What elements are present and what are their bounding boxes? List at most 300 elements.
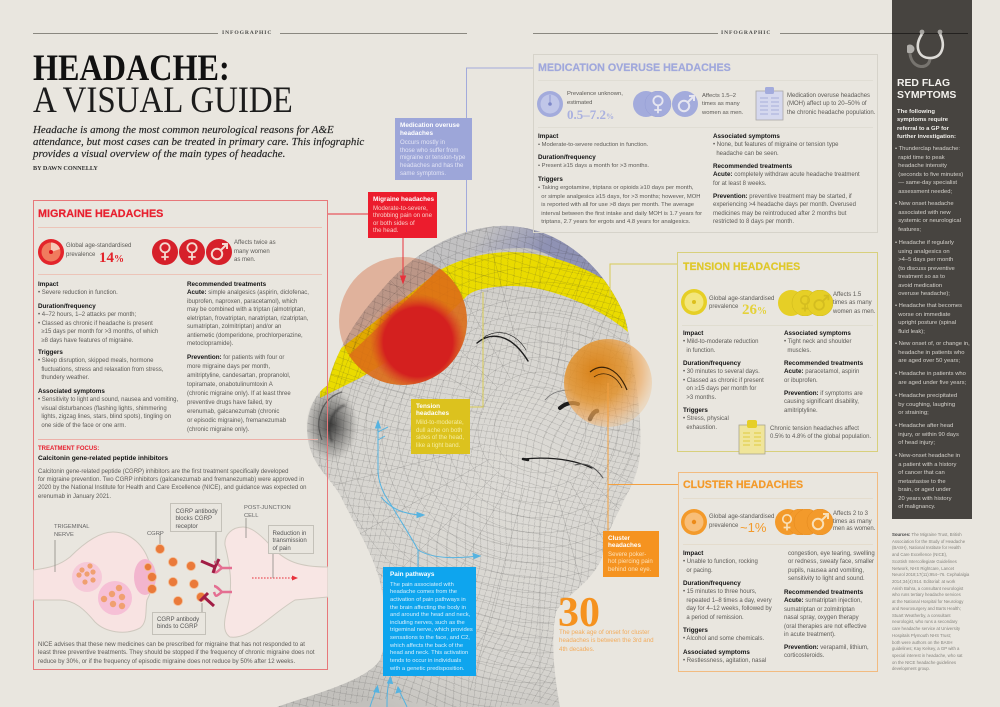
text: prevention: Prevention: if symptoms are: [784, 390, 863, 397]
connector: cluster: [608, 383, 678, 531]
receptors: [214, 562, 232, 596]
treatment focus heading: TREATMENT FOCUS:: [38, 446, 99, 452]
text: recommended treatments: may be combined with a triptan (almotriptan,: [187, 307, 305, 313]
callout: pain pathways: Pain pathways The pain associated with: [390, 570, 454, 588]
symptom list: upright posture (spinal: [898, 320, 956, 326]
text: associated symptoms: visual disturbances (flashing lights, shimmering: [41, 406, 167, 412]
text: impact: • Moderate-to-severe reduction in function.: [538, 142, 648, 148]
symptom list: treatment so as to: [898, 274, 945, 280]
chronic tension fact: [770, 425, 871, 442]
prevalence text: [709, 296, 774, 310]
sources: who runs tertiary headache services: [892, 592, 961, 597]
callout: pain pathways: tends to occur in individuals: [390, 658, 461, 664]
caption: 4th decades.: [559, 646, 594, 653]
gender text: women as men.: [702, 110, 743, 116]
sources: and Care Excellence (NICE),: [892, 552, 947, 557]
label: post-junction cell: POST-JUNCTION: [244, 505, 291, 511]
treatment focus paragraph: Calcitonin gene-related peptide (CGRP) inhibitors are the first treatment specifically developed: [38, 469, 288, 475]
text: recommended treatments: Acute: completely withdraw acute headache treatment: [713, 171, 860, 178]
symptom list: • Headache that becomes: [895, 303, 962, 309]
text: symptoms continued: sensitivity to light and sound.: [788, 576, 865, 582]
panel: tension headaches: [677, 252, 878, 452]
intro text: Headache is among the most common neurological reasons for A&E: [33, 124, 334, 136]
heading: red flag symptoms: [897, 78, 956, 102]
symptom list: rapid time to peak: [898, 154, 945, 160]
symptom list: • New onset headache: [895, 201, 954, 207]
closing paragraph: reduce by 30%, or if the frequency of episodic migraine does not reduce by 50% after 12 weeks.: [38, 659, 295, 665]
text: duration: Duration/frequency: [38, 302, 96, 310]
symptom list: worse on immediate: [898, 312, 951, 318]
text: duration: Duration/frequency: [538, 154, 596, 161]
callout: antibody binds: CGRP antibody: [157, 616, 199, 622]
text: duration: Duration/frequency: [683, 360, 741, 367]
sources: guidelines; Kay Kelsey, a GP with a: [892, 646, 959, 651]
panel: cluster headaches: [678, 472, 878, 672]
text: triggers: exhaustion.: [686, 425, 717, 431]
symptom list: • Headache precipitated: [895, 393, 957, 399]
main title: [33, 48, 293, 121]
icon: stethoscope: [907, 26, 952, 72]
icon: gender ratio: [633, 91, 698, 117]
prevalence text: [567, 91, 623, 106]
icon: clipboard: [738, 420, 766, 455]
text: triggers: [538, 176, 702, 225]
sources: on the NICE headache guidelines: [892, 660, 956, 665]
text: associated symptoms: [38, 388, 178, 429]
header rule with infographic label, right: INFOGRAPHIC: [721, 30, 771, 36]
text: prevention: Prevention: preventive treatment may be started, if: [713, 193, 852, 200]
text: associated symptoms: muscles.: [787, 348, 811, 354]
callout: cluster headaches: headaches Severe poker-: [608, 542, 646, 558]
callout: pain pathways: activation of pain pathways in: [390, 597, 466, 603]
diagram: CGRP synapse: [33, 505, 328, 638]
text: prevention: amitriptyline, candesartan, propranolol,: [187, 372, 290, 378]
text: triggers: triptans, 2.7 years for ergots and 4.8 years for analgesics.: [541, 219, 690, 225]
symptom list: avoid medication: [898, 282, 942, 288]
gender text: Affects 1.5: [833, 292, 861, 298]
sources: [892, 532, 969, 673]
sources: neurologist, who runs a secondary: [892, 619, 957, 624]
text: triggers: is reported with all for use >8 days per month. The average: [541, 202, 694, 208]
intro text: [32, 124, 364, 160]
text: prevention: (chronic migraine only). If at least three: [187, 390, 291, 396]
symptom list: (to discuss preventive: [898, 266, 955, 272]
text: prevention: experiencing >4 headache days per month. Overused: [713, 202, 856, 208]
heading: cluster: CLUSTER HEADACHES: [683, 479, 803, 491]
symptom list: of malignancy.: [898, 504, 936, 510]
text: impact: [683, 330, 758, 354]
text: prevention: restricted to 8 days per month.: [713, 219, 794, 225]
text: recommended treatments: ibuprofen, naproxen, paracetamol), which: [187, 299, 297, 305]
text: impact: Impact: [538, 133, 558, 140]
connector: tension: [470, 264, 677, 407]
caption: The peak age of onset for cluster: [559, 629, 649, 636]
sources: care headache service at University: [892, 626, 960, 631]
gender text: times as many: [702, 101, 740, 107]
symptom list: • Thunderclap headache:: [895, 146, 960, 152]
text: duration: • 4–72 hours, 1–2 attacks per month;: [38, 312, 136, 318]
text: impact: or pacing.: [686, 568, 713, 574]
callout: pain pathways: trigeminal nerve, which provides: [390, 627, 473, 633]
ear: [306, 389, 358, 461]
callout: tension headaches: sides of the head,: [416, 434, 464, 441]
text: impact: [538, 133, 648, 148]
sources: Association for the Study of Headache: [892, 539, 965, 544]
sources: both were authors on the BASH: [892, 640, 952, 644]
stat: 0.5-7.2%: 0.5–7.2%: [567, 107, 614, 122]
callout: antibody blocks receptor: blocks CGRP: [176, 515, 212, 522]
text: symptoms continued: [788, 550, 875, 584]
text: recommended treatments: antiemetic (domperidone, prochlorperazine,: [187, 333, 303, 339]
main title: A VISUAL GUIDE: [33, 80, 293, 121]
text: duration: [38, 302, 158, 344]
chronic tension fact: Chronic tension headaches affect: [770, 426, 859, 432]
diagram: CGRP synapse: CELL: [244, 513, 259, 519]
text: recommended treatments: Recommended treatments: [784, 360, 863, 367]
text: triggers: • Taking ergotamine, triptans or opioids ≥10 days per month,: [538, 185, 694, 191]
callout: medication overuse headaches: headaches Occurs mostly in: [400, 130, 445, 146]
callout: tension headaches: dull ache on both: [416, 427, 462, 434]
text: prevention: topiramate, onabotulinumtoxin A: [187, 382, 273, 388]
MOH fact: the chronic headache population.: [787, 110, 875, 116]
symptom list: are aged under five years;: [898, 380, 966, 386]
panel: medication overuse headaches: [533, 54, 878, 233]
text: prevention: [784, 644, 869, 661]
text: associated symptoms: • Tight neck and shoulder: [784, 339, 851, 345]
text: prevention: (chronic migraine only).: [187, 426, 249, 432]
callout: cluster headaches: hot piercing pain: [608, 558, 653, 565]
callout: pain pathways: sensations to the face, and C2,: [390, 635, 470, 641]
text: triggers: Triggers: [683, 407, 708, 414]
callout: reduction in pain: of pain: [272, 545, 291, 552]
text: recommended treatments: Acute: simple analgesics (aspirin, diclofenac,: [187, 289, 309, 296]
text: associated symptoms: one side of the face or one arm.: [41, 423, 126, 429]
text: duration: • 30 minutes to several days.: [683, 369, 760, 375]
gender text: times as many: [833, 519, 872, 525]
text: impact: [38, 281, 118, 296]
text: associated symptoms: • None, but features of migraine or tension type: [713, 142, 839, 148]
symptom list: headache in patients who: [898, 350, 965, 356]
text: prevention: Prevention: for patients with four or: [187, 354, 284, 360]
text: triggers: thundery weather.: [41, 375, 89, 381]
MOH fact: (MOH) affect up to 20–50% of: [787, 101, 867, 107]
icon: gender ratio: [778, 290, 833, 316]
symptom list: a patient with a history: [898, 462, 956, 468]
caption: headaches is between the 3rd and: [559, 637, 654, 644]
callout: reduction in pain: [269, 526, 313, 553]
prevalence text: Global age-standardised: [709, 514, 774, 520]
symptom list: [895, 145, 971, 511]
callout: medication overuse headaches: Medication overuse: [400, 122, 460, 129]
head silhouette: [277, 226, 641, 707]
callout: migraine headaches: throbbing pain on one: [373, 212, 432, 219]
pointer lines: [55, 518, 273, 614]
text: prevention: [187, 354, 291, 432]
symptom list: systemic or neurological: [898, 218, 961, 224]
prevalence text: prevalence: [66, 252, 95, 258]
text: prevention: amitriptyline.: [784, 408, 818, 414]
text: prevention: medicines may be reintroduced after 2 months but: [713, 211, 846, 217]
icon: clipboard: [756, 87, 784, 120]
panel: red flag symptoms: [892, 0, 972, 519]
text: triggers: • Stress, physical: [683, 416, 729, 422]
text: associated symptoms: [713, 133, 839, 157]
icon: medication prevalence: [537, 91, 563, 117]
callout: medication overuse headaches: those who suffer from: [400, 147, 458, 154]
cluster pain zone: [564, 339, 652, 427]
callout: migraine headaches: [368, 192, 437, 238]
text: duration: • Present ≥15 days a month for >3 months.: [538, 163, 649, 169]
text: duration: ≥15 days per month for >3 months, of which: [41, 329, 158, 335]
gender text: Affects twice as: [234, 240, 276, 246]
text: prevention: corticosteroids.: [784, 653, 824, 659]
sources: special interest in headache, who sat: [892, 653, 962, 658]
sources: Hospitals Plymouth NHS Trust;: [892, 633, 951, 638]
text: recommended treatments: or ibuprofen.: [784, 378, 818, 384]
text: associated symptoms: Associated symptoms: [713, 133, 780, 140]
symptom list: using analgesics on: [898, 248, 950, 254]
text: impact: Impact: [38, 281, 58, 288]
symptom list: by coughing, laughing: [898, 402, 955, 408]
text: associated symptoms: • Sensitivity to light and sound, nausea and vomiting,: [38, 397, 178, 403]
text: recommended treatments: (oral therapies are not effective: [784, 624, 867, 630]
callout: medication overuse headaches: headaches and has the: [400, 162, 463, 169]
symptom list: overuse headache);: [898, 291, 950, 297]
treatment focus heading: Calcitonin gene-related peptide inhibitors: [38, 454, 168, 462]
text: triggers: Triggers: [683, 627, 708, 634]
text: impact: Impact: [683, 550, 703, 557]
callout: antibody binds: [153, 613, 205, 634]
symptom list: • Headache after head: [895, 423, 953, 429]
face features: [477, 333, 603, 478]
text: symptoms continued: pupils, nausea and vomiting,: [788, 568, 864, 574]
text: duration: >3 months.: [686, 395, 716, 401]
symptom list: assessment needed;: [898, 188, 952, 194]
text: duration: [538, 154, 649, 169]
text: duration: on ≥15 days per month for: [686, 386, 756, 392]
prevalence text: Global age-standardised: [709, 296, 774, 302]
head illustration: [278, 226, 652, 707]
treatment focus paragraph: erenumab in January 2021.: [38, 494, 111, 500]
callout: migraine headaches: or both sides of: [373, 220, 415, 227]
heading: migraine: MIGRAINE HEADACHES: [38, 208, 163, 220]
callout: pain pathways: with a genetic predisposition.: [390, 666, 464, 672]
closing paragraph: NICE advises that these new medicines can be prescribed for migraine that has not responded to at: [38, 642, 305, 648]
intro text: referral to a GP for: [897, 126, 949, 132]
stat: 30 median age: [558, 590, 654, 653]
text: prevention: more migraine days per month,: [187, 364, 270, 370]
heading: medication overuse: MEDICATION OVERUSE HEADACHES: [538, 62, 731, 74]
text: prevention: or episodic migraine), fremanezumab: [187, 418, 286, 424]
symptom list: headache intensity: [898, 163, 947, 169]
text: associated symptoms: • Restlessness, agitation, nasal: [683, 658, 766, 664]
heading: red flag symptoms: RED FLAG: [897, 78, 950, 89]
text: recommended treatments: sumatriptan or zolmitriptan: [784, 607, 855, 613]
callout: cluster headaches: behind one eye.: [608, 566, 651, 573]
byline: BY DAWN CONNELLY: [33, 165, 98, 172]
text: duration: day for 4–12 weeks, followed by: [686, 606, 772, 612]
text: prevention: causing significant disability,: [784, 399, 859, 405]
connector: medication overuse: [466, 68, 533, 232]
callout: reduction in pain: Reduction in: [272, 530, 306, 536]
icon: gender ratio: [152, 239, 232, 265]
text: recommended treatments: [784, 589, 867, 640]
number 30: 30: [558, 590, 600, 636]
prevalence text: [66, 242, 131, 258]
migraine pain zone: [339, 257, 467, 385]
gender text: [234, 240, 276, 263]
label: CGRP: CGRP: [147, 531, 164, 537]
text: duration: • Classed as chronic if headache is present: [38, 320, 153, 326]
text: associated symptoms: headache can be seen.: [716, 151, 779, 157]
text: impact: • Severe reduction in function.: [38, 290, 118, 296]
gender text: as men.: [234, 257, 255, 263]
text: duration: • 15 minutes to three hours,: [683, 589, 756, 595]
text: triggers: [683, 407, 729, 432]
text: associated symptoms: Associated symptoms: [784, 330, 851, 337]
text: triggers: fluctuations, stress and relaxation from stress,: [41, 367, 163, 373]
callout: medication overuse headaches: [395, 118, 472, 180]
MOH fact: [787, 92, 875, 116]
text: triggers: interval between the first intake and daily MOH is 1.7 years for: [541, 211, 702, 217]
CGRP molecules: [144, 544, 206, 606]
text: duration: [683, 580, 772, 622]
text: triggers: or simple analgesics ≥15 days, for >3 months; however, MOH: [541, 194, 701, 200]
prevalence text: Prevalence unknown,: [567, 91, 623, 97]
symptom list: are aged over 50 years;: [898, 358, 960, 364]
gender text: many women: [234, 248, 270, 254]
text: duration: [683, 360, 764, 402]
treatment focus paragraph: for migraine prevention. Two CGRP inhibitors (galcanezumab and fremanezumab) were approved in: [38, 477, 304, 483]
text: recommended treatments: Recommended treatments: [784, 589, 863, 596]
text: recommended treatments: sumatriptan, zolmitriptan) and/or an: [187, 324, 281, 330]
symptom list: >4–5 days per month: [898, 257, 953, 263]
text: triggers: [683, 627, 764, 644]
text: duration: a period of remission.: [686, 615, 744, 621]
text: recommended treatments: [713, 163, 860, 187]
symptom list: of cancer that can: [898, 470, 945, 476]
main title: HEADACHE:: [33, 48, 230, 89]
text: recommended treatments: Acute: paracetamol, aspirin: [784, 368, 859, 375]
text: recommended treatments: metoclopramide).: [187, 341, 233, 347]
heading: red flag symptoms: SYMPTOMS: [897, 90, 956, 101]
gender text: times as many: [833, 300, 872, 306]
text: duration: Duration/frequency: [683, 580, 741, 587]
text: recommended treatments: Recommended treatments: [187, 281, 266, 288]
callout: medication overuse headaches: migraine or tension-type: [400, 154, 465, 161]
icon: cluster prevalence: [681, 509, 707, 535]
wireframe mesh: [278, 226, 640, 707]
text: recommended treatments: eletriptan, frovatriptan, naratriptan, rizatriptan,: [187, 316, 308, 322]
intro text: further investigation:: [897, 134, 956, 140]
prevalence text: Global age-standardised: [66, 243, 131, 249]
sources: Stuart Weatherby, a consultant: [892, 613, 951, 618]
sources: and Neurosurgery and Barts Health;: [892, 606, 961, 611]
text: triggers: Triggers: [538, 176, 563, 183]
callout: tension headaches: headaches Mild-to-moderate,: [416, 410, 464, 426]
stat: 26%: 26%: [742, 302, 767, 318]
text: recommended treatments: [784, 360, 863, 385]
callout: migraine headaches: the head.: [373, 227, 398, 234]
text: symptoms continued: or redness, sweaty face, smaller: [788, 559, 874, 565]
text: recommended treatments: Recommended treatments: [713, 163, 792, 170]
treatment focus paragraph: 2020 by the National Institute for Health and Care Excellence (NICE), and guidance was expected on: [38, 485, 306, 491]
text: impact: • Unable to function, rocking: [683, 559, 758, 565]
intro text: provides a visual overview of the main types of headache.: [33, 148, 285, 160]
text: duration: repeated 1–8 times a day, every: [686, 598, 772, 604]
sources: Sources: The Migraine Trust, British: [892, 532, 962, 537]
callout: tension headaches: like a tight band.: [416, 442, 460, 449]
treatment focus paragraph: [38, 468, 306, 500]
gender text: women as men.: [833, 308, 875, 314]
MOH fact: Medication overuse headaches: [787, 92, 870, 98]
icon: tension prevalence: [681, 289, 707, 315]
prevalence text: estimated: [567, 100, 592, 106]
symptom list: brain, or aged under: [898, 487, 951, 493]
symptom list: features;: [898, 226, 921, 232]
symptom list: 20 years with history: [898, 496, 952, 502]
text: impact: Impact: [683, 330, 703, 337]
gender text: [702, 92, 743, 116]
icon: migraine prevalence: [38, 239, 64, 265]
symptom list: — same-day specialist: [898, 180, 957, 186]
text: recommended treatments: in acute treatment).: [784, 632, 836, 638]
text: associated symptoms: Associated symptoms: [683, 649, 750, 656]
text: prevention: Prevention: verapamil, lithium,: [784, 644, 869, 651]
symptom list: • New-onset headache in: [895, 453, 960, 459]
callout: reduction in pain: transmission: [272, 537, 307, 544]
callout: antibody blocks receptor: receptor: [176, 523, 198, 530]
headband zones: purple crown and yellow tension band: [320, 222, 640, 398]
callout: antibody blocks receptor: CGRP antibody: [176, 508, 218, 514]
treatment focus heading: [38, 446, 168, 462]
gender text: Affects 1.5–2: [702, 92, 736, 98]
sources: development group.: [892, 666, 930, 671]
text: impact: [683, 550, 758, 575]
callout: pain pathways: the brain affecting the body in: [390, 604, 466, 610]
text: associated symptoms: [784, 330, 851, 355]
transmission arrow: [252, 576, 298, 580]
text: triggers: • Alcohol and some chemicals.: [683, 636, 764, 642]
symptom list: • Headache in patients who: [895, 371, 966, 377]
symptom list: injury, or within 90 days: [898, 432, 959, 438]
text: recommended treatments: nasal spray, oxygen therapy: [784, 615, 859, 621]
symptom list: fluid leak);: [898, 328, 925, 334]
icon: gender ratio: [775, 509, 834, 535]
closing paragraph: least three preventive treatments. They should be stopped if the frequency of chronic migraine does not: [38, 650, 315, 656]
symptom list: • New onset of, or change in,: [895, 341, 970, 347]
text: triggers: [38, 349, 163, 381]
text: prevention: erenumab, galcanezumab (chronic: [187, 408, 279, 414]
stat: 14%: 14%: [99, 250, 124, 266]
symptom list: metastasise to the: [898, 478, 946, 484]
text: impact: • Mild-to-moderate reduction: [683, 339, 758, 345]
antibodies: [200, 559, 219, 606]
prevalence text: [709, 513, 774, 530]
gender text: [833, 292, 875, 314]
prevalence text: prevalence: [709, 304, 738, 310]
intro text: [897, 108, 956, 142]
text: impact: in function.: [686, 348, 715, 354]
intro text: symptoms require: [897, 117, 948, 123]
callout: pain pathways: head and neck. This activation: [390, 650, 468, 656]
sources: 2014;34(4):914. Editorial: at work: [892, 579, 955, 584]
callout: pain pathways: including nerves, such as the: [390, 620, 465, 626]
closing paragraph: [38, 642, 315, 665]
sources: (BASH), National Institute for Health: [892, 545, 961, 550]
text: associated symptoms: Associated symptoms: [38, 388, 105, 395]
caption: [559, 629, 654, 653]
